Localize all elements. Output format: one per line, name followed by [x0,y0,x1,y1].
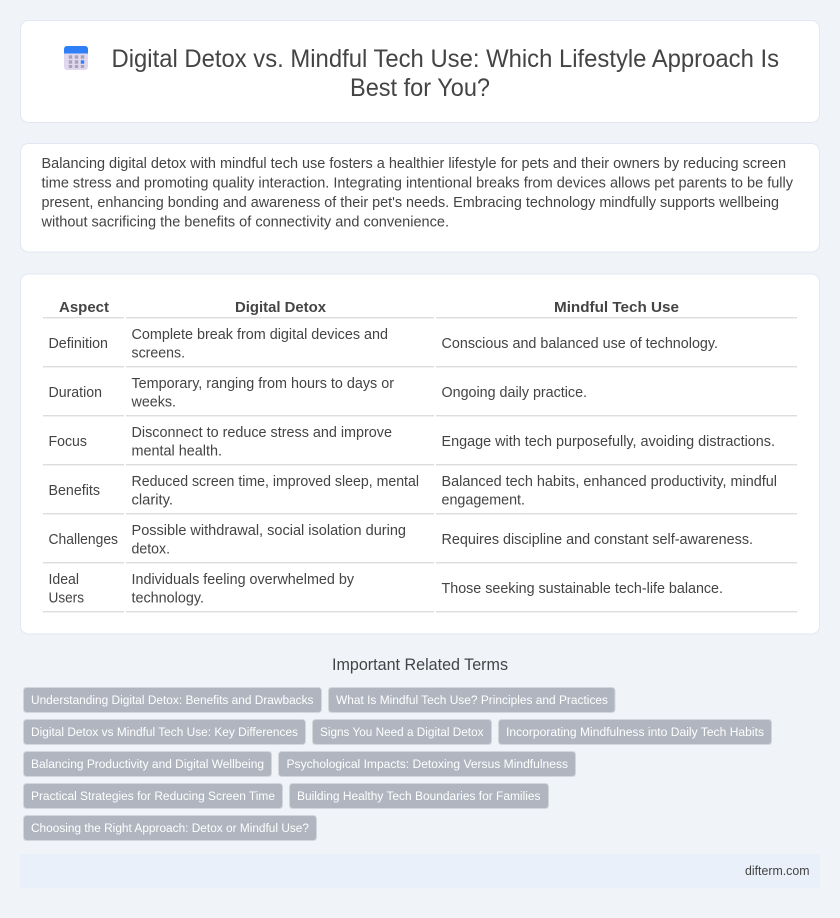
tag: Balancing Productivity and Digital Wellbeing [31,757,264,771]
table header row: Digital Detox [235,300,326,316]
tag: Understanding Digital Detox: Benefits and Drawbacks [31,693,314,707]
table row: ideal users: technology. [132,590,204,606]
tag [24,816,316,840]
tag: Signs You Need a Digital Detox [320,725,484,739]
table row: ideal users: Ideal [48,572,79,588]
tag: Practical Strategies for Reducing Screen Time [31,789,275,803]
tag [278,752,576,776]
tag [24,784,282,808]
tag: Psychological Impacts: Detoxing Versus Mindfulness [286,757,568,771]
tag: Incorporating Mindfulness into Daily Tech Habits [506,725,764,739]
tag: Building Healthy Tech Boundaries for Families [297,789,540,803]
panel: introduction [20,144,820,252]
tag [290,784,548,808]
title: Digital Detox vs. Mindful Tech Use: Which Lifestyle Approach Is [112,45,779,73]
heading: important related terms: Important Related Terms [332,656,508,674]
title: Best for You? [350,74,490,102]
table row: definition: Conscious and balanced use of technology. [442,336,718,352]
tag [312,720,492,744]
table row: focus: mental health. [132,444,222,460]
table row: challenges: Possible withdrawal, social isolation during [132,523,406,539]
tag [328,688,615,712]
panel: related term tags [24,688,772,840]
table row: ideal users [43,572,797,612]
text block: introduction paragraph: without sacrificing the benefits of connectivity and convenience. [40,215,449,231]
tag: Choosing the Right Approach: Detox or Mindful Use? [31,821,309,835]
table row: definition: Complete break from digital devices and [132,327,388,343]
icon: calendar [64,46,88,70]
tag [498,720,772,744]
table row: benefits [43,474,797,514]
table row: benefits: Balanced tech habits, enhanced productivity, mindful [442,474,777,490]
table row: focus: Focus [48,434,87,450]
table row: benefits: clarity. [132,492,173,508]
title [112,45,779,102]
table row: challenges: detox. [132,542,170,558]
table row: focus [43,425,797,465]
table row: focus: Disconnect to reduce stress and improve [132,425,392,441]
table row: focus: Engage with tech purposefully, avoiding distractions. [442,434,775,450]
footer: difterm.com [745,863,810,878]
panel: header [20,20,820,122]
tag [24,688,322,712]
table row: ideal users: Users [48,590,84,606]
table row: challenges: Challenges [48,532,118,548]
tag [24,752,272,776]
table header row: Aspect [59,300,109,316]
text block: introduction paragraph: time stress and promoting quality interaction. Integrating intentional breaks from devices allows pet parents to be fully [42,175,794,191]
table row: benefits: Reduced screen time, improved sleep, mental [132,474,419,490]
text block: introduction paragraph: Balancing digital detox with mindful tech use fosters a healthier lifestyle for pets and their owners by reducing screen [42,156,786,172]
text block: introduction paragraph [40,156,794,231]
table row: definition: Definition [48,336,108,352]
table row: duration: Ongoing daily practice. [442,385,587,401]
table row: benefits: Benefits [48,483,100,499]
footer [20,854,820,888]
table row: duration: Temporary, ranging from hours to days or [132,376,394,392]
table row: duration: weeks. [131,394,176,410]
table row: benefits: engagement. [442,492,525,508]
table row: definition: screens. [132,346,185,362]
table row: ideal users: Individuals feeling overwhelmed by [132,572,355,588]
table row: challenges: Requires discipline and constant self-awareness. [442,532,753,548]
table row: duration: Duration [48,385,102,401]
panel: comparison table [20,274,820,634]
tag: Digital Detox vs Mindful Tech Use: Key Differences [31,725,298,739]
table header row [43,300,797,318]
table row: duration [43,376,797,416]
text block: introduction paragraph: present, enhancing bonding and awareness of their pet's needs. Embracing technology mindfully supports wellbeing [42,195,779,211]
table row: challenges [43,523,797,563]
tag: What Is Mindful Tech Use? Principles and Practices [336,693,608,707]
table header row: Mindful Tech Use [554,300,679,316]
table row: ideal users: Those seeking sustainable tech-life balance. [442,581,723,597]
tag [24,720,306,744]
table row: definition [43,327,797,367]
